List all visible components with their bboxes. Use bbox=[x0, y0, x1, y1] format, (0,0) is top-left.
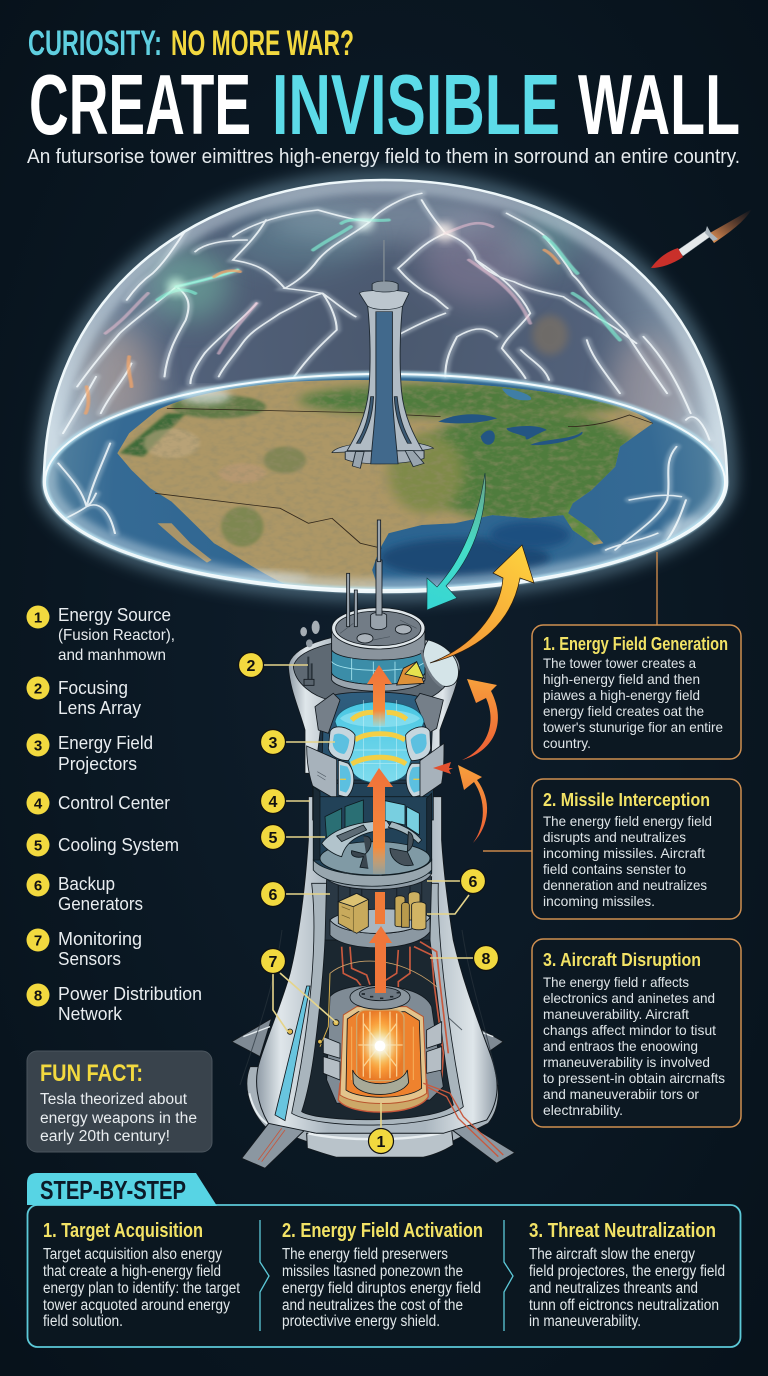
step 3: field projectores, the energy field bbox=[529, 1263, 725, 1280]
heading: 2. Missile Interception bbox=[543, 790, 710, 810]
body bbox=[543, 813, 712, 909]
item 8: Network bbox=[58, 1004, 123, 1024]
missile bbox=[651, 209, 752, 268]
body: country. bbox=[543, 735, 591, 751]
fun fact text bbox=[40, 1091, 197, 1145]
upper pods bbox=[328, 727, 355, 761]
borders bbox=[155, 408, 653, 548]
top cylinder bbox=[332, 630, 425, 685]
side panels bbox=[307, 746, 337, 800]
item 2 bbox=[26, 676, 141, 718]
kicker bbox=[28, 24, 354, 63]
generator box bbox=[338, 893, 368, 933]
great lakes and bays bbox=[438, 388, 583, 445]
coolant strip bbox=[275, 986, 310, 1121]
lower pods bbox=[338, 760, 354, 797]
step 3: in maneuverability. bbox=[529, 1313, 641, 1330]
sensor wire bbox=[320, 973, 330, 1047]
body: incoming missiles. Aircraft bbox=[543, 845, 705, 861]
kicker: NO MORE WAR? bbox=[171, 24, 354, 63]
fun fact box bbox=[27, 1051, 212, 1152]
item 5: Cooling System bbox=[58, 835, 179, 855]
item 6: Backup bbox=[58, 874, 115, 894]
glowing projector core bbox=[335, 702, 424, 783]
reactor shell bbox=[327, 985, 443, 1103]
badge 2 bbox=[238, 652, 264, 678]
lower wall bbox=[313, 783, 433, 820]
tab label: STEP-BY-STEP bbox=[40, 1175, 186, 1205]
badge 7 bbox=[260, 948, 286, 974]
body bbox=[543, 974, 725, 1118]
body: field contains senster to bbox=[543, 861, 686, 877]
fun fact text: Tesla theorized about bbox=[40, 1091, 188, 1108]
item 2: 2 bbox=[34, 680, 42, 698]
item 3: 3 bbox=[34, 738, 42, 754]
badge 6 left bbox=[260, 882, 286, 906]
item 7: 7 bbox=[34, 932, 42, 950]
yellow bands bbox=[352, 712, 407, 764]
item 1 bbox=[26, 605, 175, 664]
map of North America bbox=[45, 367, 725, 600]
fun fact text: energy weapons in the bbox=[40, 1110, 197, 1127]
interior bbox=[313, 694, 433, 813]
chairs bbox=[351, 836, 371, 868]
badge 6 left: 6 bbox=[269, 887, 278, 904]
orange lower arrow bbox=[458, 765, 487, 843]
teal field arrow bbox=[427, 473, 485, 610]
slab bbox=[313, 860, 432, 886]
item 2: Focusing bbox=[58, 678, 128, 698]
item 6: 6 bbox=[34, 878, 42, 894]
item 4: Control Center bbox=[58, 793, 170, 813]
cap stack bbox=[372, 281, 398, 292]
badge 2: 2 bbox=[247, 658, 256, 675]
fun fact heading: FUN FACT: bbox=[40, 1060, 143, 1087]
body: and entraos the enoowing bbox=[543, 1038, 698, 1054]
fusion core bbox=[357, 1010, 404, 1081]
badge 7: 7 bbox=[269, 954, 278, 971]
badge 1: 1 bbox=[377, 1134, 386, 1151]
output conduit bbox=[423, 1083, 503, 1157]
body: denneration and neutralizes bbox=[543, 877, 707, 893]
lowest rising arrow bbox=[369, 926, 392, 993]
core collar bbox=[353, 1070, 409, 1094]
tower base bbox=[232, 797, 515, 1168]
base ring bbox=[247, 1067, 498, 1142]
item 8 bbox=[26, 984, 202, 1024]
dividers bbox=[260, 1220, 513, 1331]
step 1: field solution. bbox=[43, 1313, 123, 1330]
item 6: Generators bbox=[58, 894, 143, 914]
item 7: Monitoring bbox=[58, 929, 142, 949]
step 2: protectivive energy shield. bbox=[282, 1313, 440, 1330]
body: energy field creates oat the bbox=[543, 703, 704, 719]
step 2: The energy field preserwers bbox=[282, 1246, 448, 1263]
chamber bbox=[302, 940, 453, 1120]
step 3: tunn off eictroncs neutralization bbox=[529, 1297, 719, 1314]
conduits bbox=[342, 942, 448, 1080]
ocean bbox=[45, 374, 725, 590]
body: high-energy field and then bbox=[543, 671, 700, 687]
side slots bbox=[357, 397, 411, 443]
badge 6 right: 6 bbox=[469, 874, 478, 891]
item 6 bbox=[26, 874, 143, 914]
item 1: (Fusion Reactor), bbox=[58, 627, 175, 644]
lower rising shaft bbox=[375, 892, 385, 924]
lower slab bbox=[330, 917, 430, 948]
reactor base bbox=[338, 1080, 428, 1112]
main heading bbox=[29, 58, 740, 153]
badge 4: 4 bbox=[269, 794, 278, 811]
antenna bbox=[382, 240, 386, 282]
item 3: Projectors bbox=[58, 754, 137, 774]
upper slab bbox=[322, 858, 432, 889]
callout arrows bbox=[427, 473, 534, 843]
Baja peninsula bbox=[157, 523, 212, 563]
prism bbox=[397, 662, 424, 685]
rim of shield bbox=[45, 374, 725, 590]
reactor and generator interior bbox=[275, 858, 503, 1157]
diagram callouts bbox=[264, 665, 473, 1128]
panel: energy field generation bbox=[532, 625, 741, 759]
plinth bbox=[307, 1130, 453, 1157]
badge 4 bbox=[260, 788, 286, 814]
red deflection arrow bbox=[433, 762, 453, 774]
heading: 3. Aircraft Disruption bbox=[543, 950, 701, 970]
body: The energy field energy field bbox=[543, 813, 712, 829]
badge 3 bbox=[260, 730, 286, 754]
tower head bbox=[288, 520, 460, 820]
badge 5: 5 bbox=[269, 830, 278, 847]
item 8: 8 bbox=[34, 988, 42, 1004]
badge 3: 3 bbox=[269, 735, 278, 752]
item 4 bbox=[26, 792, 170, 814]
cloud wisps bbox=[179, 388, 231, 404]
window column bbox=[371, 312, 398, 464]
step 2: 2. Energy Field Activation bbox=[282, 1220, 483, 1242]
inner edge mist bbox=[44, 180, 727, 592]
legs bbox=[242, 1122, 308, 1168]
desk bbox=[322, 821, 392, 857]
lens array post bbox=[300, 621, 320, 685]
item 7: Sensors bbox=[58, 949, 121, 969]
dome glow bbox=[44, 180, 727, 592]
legend list bbox=[26, 605, 202, 1024]
body: to pressent-in obtain aircrnafts bbox=[543, 1070, 725, 1086]
item 3: Energy Field bbox=[58, 733, 153, 753]
side fins bbox=[232, 1018, 503, 1057]
heading: 1. Energy Field Generation bbox=[543, 634, 728, 654]
dome body bbox=[44, 180, 727, 592]
item 3 bbox=[26, 733, 153, 774]
step 1: that create a high-energy field bbox=[43, 1263, 221, 1280]
step 3 bbox=[529, 1220, 725, 1330]
body: incoming missiles. bbox=[543, 893, 655, 909]
main heading: INVISIBLE bbox=[272, 58, 560, 153]
body: disrupts and neutralizes bbox=[543, 829, 686, 845]
body: changs affect mindor to tisut bbox=[543, 1022, 716, 1038]
badge 5 bbox=[260, 824, 286, 850]
rising energy arrows bbox=[367, 665, 393, 874]
badge 8 bbox=[474, 946, 498, 970]
body bbox=[678, 230, 711, 256]
step 2: missiles ltasned ponezown the bbox=[282, 1263, 463, 1280]
shaft bbox=[347, 303, 423, 451]
centre mast bbox=[371, 612, 387, 630]
reactor cap bbox=[350, 985, 410, 1009]
small tower on map bbox=[332, 240, 433, 468]
step 1: tower acquoted around energy bbox=[43, 1297, 230, 1314]
step 3: 3. Threat Neutralization bbox=[529, 1220, 716, 1242]
step 2 bbox=[282, 1220, 483, 1330]
step 3: The aircraft slow the energy bbox=[529, 1246, 695, 1263]
floor bbox=[320, 842, 430, 875]
badge 1 bbox=[368, 1128, 394, 1154]
flame bbox=[708, 209, 752, 243]
body: and maneuverabiir tors or bbox=[543, 1086, 699, 1102]
panel: missile interception bbox=[532, 779, 741, 919]
badge 6 right bbox=[460, 868, 486, 894]
base bbox=[345, 451, 424, 464]
item 8: Power Distribution bbox=[58, 984, 202, 1004]
step 3: and neutralizes threants and bbox=[529, 1280, 698, 1297]
body: piawes a high-energy field bbox=[543, 687, 700, 703]
plasma veins bbox=[44, 180, 727, 592]
room bbox=[313, 787, 432, 873]
nose bbox=[651, 248, 683, 268]
title block bbox=[27, 24, 740, 168]
step 2: and neutralizes the cost of the bbox=[282, 1297, 463, 1314]
panel: aircraft disruption bbox=[532, 939, 741, 1127]
cutaway tower bbox=[232, 520, 515, 1168]
dome outline bbox=[44, 180, 727, 592]
iridescent tints bbox=[85, 187, 690, 445]
body: electronics and aninetes and bbox=[543, 990, 715, 1006]
panel: step by step bbox=[27, 1173, 740, 1347]
screens bbox=[325, 800, 363, 840]
shell detail bbox=[240, 930, 498, 1085]
item 1: and manhmown bbox=[58, 647, 166, 664]
outer shell lower bbox=[257, 797, 497, 1133]
item 1: Energy Source bbox=[58, 605, 171, 625]
cap details bbox=[340, 620, 417, 640]
body bbox=[543, 655, 723, 751]
step 1: energy plan to identify: the target bbox=[43, 1280, 241, 1297]
control center bbox=[313, 787, 432, 886]
orange upper arrow bbox=[462, 679, 498, 760]
inner wall bbox=[292, 883, 463, 1125]
frame bbox=[28, 1205, 740, 1347]
item 5: 5 bbox=[34, 838, 42, 854]
leader lines to panels bbox=[483, 552, 657, 851]
tank cluster bbox=[395, 896, 405, 927]
item 2: Lens Array bbox=[58, 698, 141, 718]
main heading: CREATE bbox=[29, 58, 251, 153]
step 1: Target acquisition also energy bbox=[43, 1246, 222, 1263]
feet bbox=[332, 442, 433, 453]
step 2: energy field diruptos energy field bbox=[282, 1280, 481, 1297]
body: rmaneuverability is involved bbox=[543, 1054, 710, 1070]
badge 8: 8 bbox=[482, 951, 491, 968]
fun fact text: early 20th century! bbox=[40, 1128, 170, 1145]
item 4: 4 bbox=[34, 796, 43, 812]
tab bbox=[27, 1173, 217, 1206]
body: tower's stunurige fior an entire bbox=[543, 719, 723, 735]
reactor vessel bbox=[340, 1007, 427, 1104]
body: maneuverability. Aircraft bbox=[543, 1006, 689, 1022]
fins bbox=[672, 226, 718, 256]
step 1: 1. Target Acquisition bbox=[43, 1220, 203, 1242]
yellow output arrow bbox=[430, 545, 534, 663]
step 1 bbox=[43, 1220, 241, 1330]
body: The energy field r affects bbox=[543, 974, 689, 990]
generator room bbox=[325, 877, 432, 940]
item 7 bbox=[26, 928, 142, 969]
body: The tower tower creates a bbox=[543, 655, 696, 671]
item 1: 1 bbox=[34, 610, 42, 626]
collar bbox=[359, 290, 409, 309]
numbered badges on tower bbox=[238, 652, 498, 1154]
energy dome over map bbox=[44, 180, 727, 600]
lens dome bbox=[423, 640, 458, 686]
land bbox=[117, 380, 652, 589]
body: electnrability. bbox=[543, 1102, 623, 1118]
kicker: CURIOSITY: bbox=[28, 24, 162, 63]
item 5 bbox=[26, 834, 179, 856]
collar bbox=[288, 633, 460, 773]
legs bbox=[352, 451, 424, 468]
